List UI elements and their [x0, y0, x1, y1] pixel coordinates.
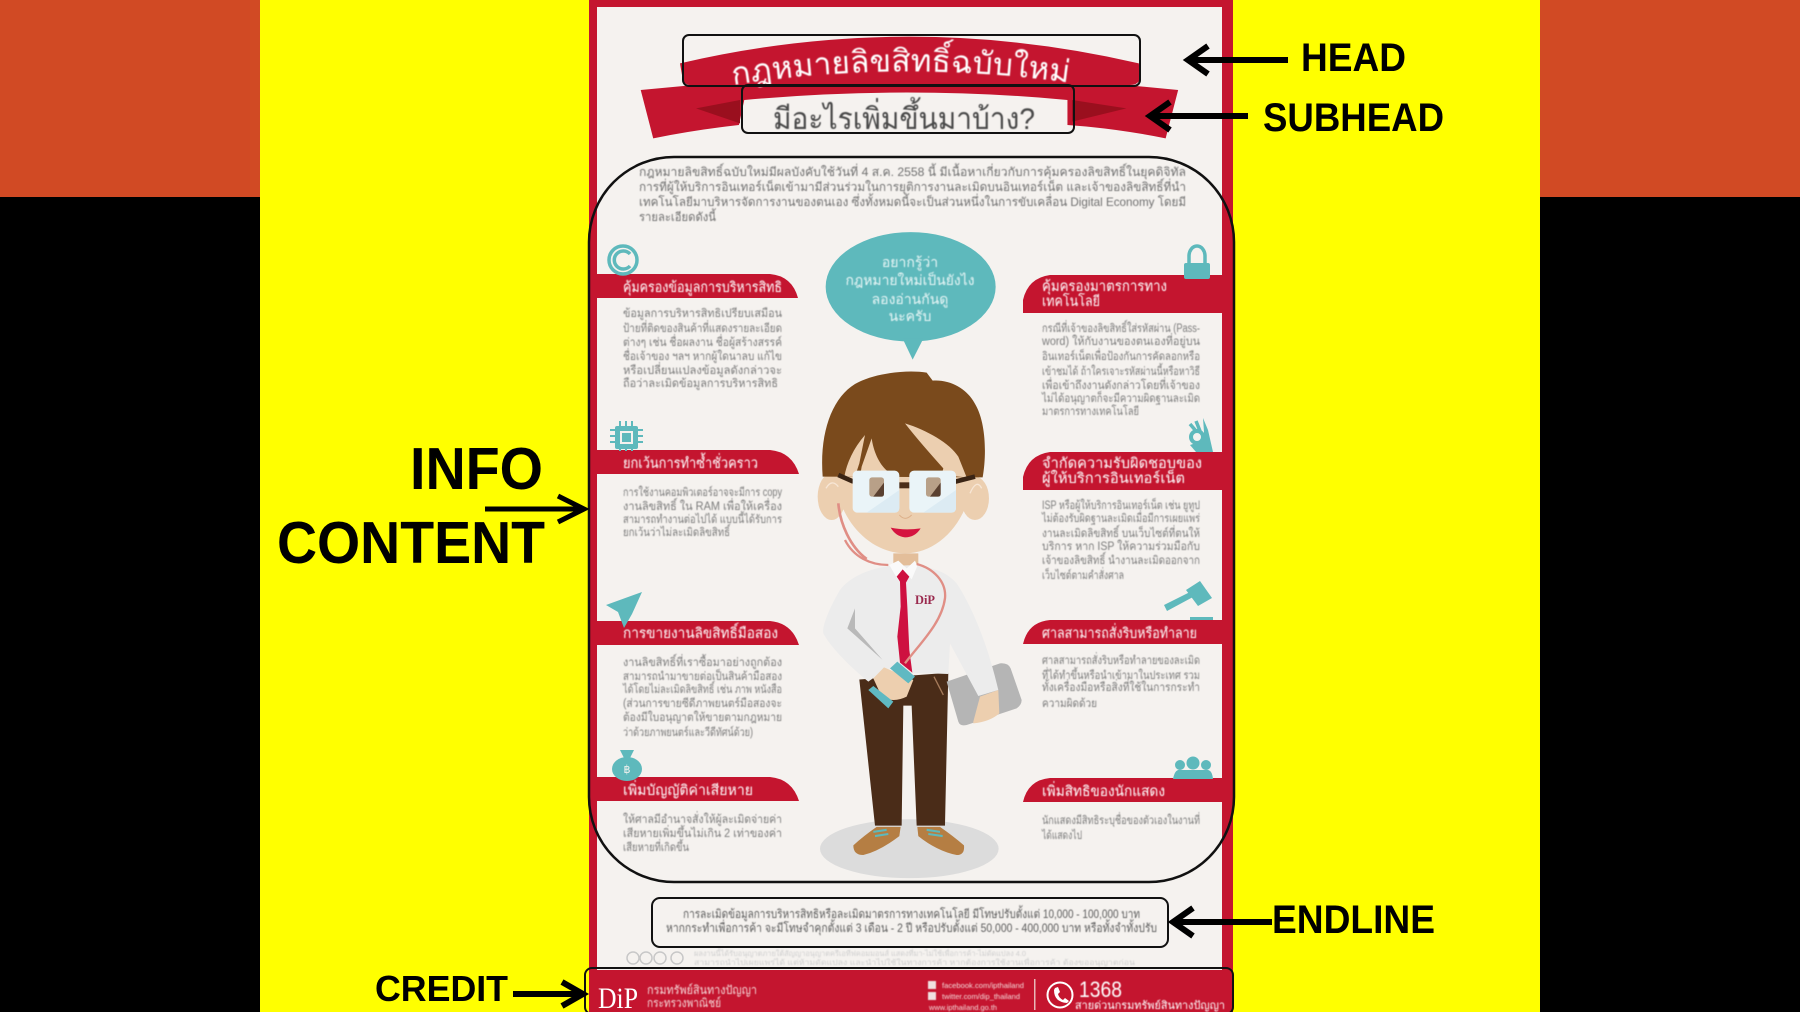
- left section 1: rights management information: [597, 274, 798, 390]
- label: SUBHEAD: SUBHEAD: [1263, 96, 1444, 140]
- left section 3: second-hand sale: การขายงานลิขสิทธิ์มือสอง: [623, 622, 778, 642]
- right section 1: technological measures: คุ้มครองมาตรการทาง: [1042, 278, 1167, 295]
- label: CREDIT: CREDIT: [375, 968, 508, 1009]
- right section 2: ISP liability: งานละเมิดลิขสิทธิ์ บนเว็บไซต์ที่ตนให้: [1042, 524, 1200, 540]
- right section 1: technological measures: word) ให้กับงานของตนเองที่อยู่บน: [1041, 333, 1200, 348]
- icons: creative commons: [627, 952, 683, 964]
- right section 3: court seizure: ศาลสามารถสั่งริบหรือทำลายของละเมิด: [1042, 652, 1200, 667]
- label: CONTENT: CONTENT: [277, 510, 545, 576]
- text block: department name: กรมทรัพย์สินทางปัญญา: [647, 983, 757, 997]
- right section 1: technological measures: ไม่ได้อนุญาตก็จะมีความผิดฐานละเมิด: [1041, 390, 1200, 405]
- icon: gavel: [1164, 581, 1213, 620]
- heading: title: กฎหมายลิขสิทธิ์ฉบับใหม่: [732, 38, 1070, 88]
- arrow: info content: [485, 496, 584, 522]
- speech bubble: กฎหมายใหม่เป็นยังไง: [846, 271, 974, 288]
- left section 1: rights management information: ข้อมูลการบริหารสิทธิเปรียบเสมือน: [623, 307, 782, 320]
- right section 4: performers' rights: นักแสดงมีสิทธิระบุชื่อของตัวเองในงานที่: [1042, 812, 1200, 827]
- text block: hotline: 1368: [1079, 977, 1122, 1002]
- right section 2: ISP liability: บริการ หาก ISP ให้ความร่วมมือกับ: [1042, 540, 1200, 553]
- right section 3: court seizure: ที่ได้ทำขึ้นหรือนำเข้ามาในประเทศ รวม: [1042, 667, 1200, 682]
- text block: introduction: การที่ผู้ให้บริการอินเทอร์เน็ตเข้ามามีส่วนร่วมในการยุติการงานละเมิดบนอินเทอร์เน็ต และเจ้าของลิขสิทธิ์ที่นำ: [639, 178, 1186, 195]
- right section 3: court seizure: [1023, 620, 1223, 710]
- text block: introduction: เทคโนโลยีมาบริหารจัดการงานของตนเอง ซึ่งทั้งหมดนี้จะเป็นส่วนหนึ่งในการขับเคลื่อน Digital Economy โดยมี: [639, 193, 1186, 209]
- left section 1: rights management information: ชื่อเจ้าของ ฯลฯ หากผู้ใดนาลบ แก้ไข: [623, 348, 782, 363]
- heading: subtitle: มีอะไรเพิ่มขึ้นมาบ้าง?: [773, 97, 1035, 136]
- left section 4: damages: ให้ศาลมีอำนาจสั่งให้ผู้ละเมิดจ่ายค่า: [623, 811, 782, 826]
- left section 3: second-hand sale: (ส่วนการขายซีดีภาพยนตร์มือสองจะ: [623, 696, 782, 710]
- right section 1: technological measures: เพื่อเข้าถึงงานดังกล่าวโดยที่เจ้าของ: [1042, 377, 1200, 392]
- title ribbon: [641, 37, 1178, 138]
- left section 2: temporary copies: [597, 450, 799, 539]
- icon: phone: [1048, 982, 1072, 1008]
- text block: social links: facebook.com/ipthailand: [942, 981, 1024, 990]
- right section 2: ISP liability: เว็บไซต์ตามคำสั่งศาล: [1042, 567, 1124, 582]
- left section 3: second-hand sale: สามารถนำมาขายต่อเป็นสินค้ามือสอง: [623, 668, 782, 683]
- right section 3: court seizure: ความผิดด้วย: [1042, 697, 1097, 710]
- left section 3: second-hand sale: ว่าด้วยภาพยนตร์และวีดีทัศน์ด้วย): [623, 725, 753, 739]
- text block: hotline: สายด่วนกรมทรัพย์สินทางปัญญา: [1075, 999, 1225, 1012]
- right section 4: performers' rights: ได้แสดงไป: [1041, 829, 1082, 842]
- text block: endline: การละเมิดข้อมูลการบริหารสิทธิหรือละเมิดมาตรการทางเทคโนโลยี มีโทษปรับตั้งแต่ 10,000 - 100,000 บาท: [683, 905, 1140, 922]
- text block: licence note: ผลงานนี้ได้รับอนุญาตภายใต้สัญญาอนุญาตครีเอทีฟคอมมอนส์ แสดงที่มา-ไม่ใช้เพื่อการค้า-ไม่ดัดแปลง 4.0: [694, 948, 1026, 958]
- right section 2: ISP liability: [1023, 452, 1223, 582]
- icon: money bag: [612, 750, 642, 781]
- right section 4: performers' rights: [1023, 778, 1223, 842]
- text block: introduction: กฎหมายลิขสิทธิ์ฉบับใหม่มีผลบังคับใช้วันที่ 4 ส.ค. 2558 นี้ มีเนื้อหาเกี่ยวกับการคุ้มครองลิขสิทธิ์ในยุคดิจิทัล: [639, 163, 1186, 180]
- arrow: head: [1188, 46, 1288, 74]
- right section 2: ISP liability: ISP หรือผู้ให้บริการอินเทอร์เน็ต เช่น ยูทูป: [1042, 497, 1200, 512]
- right section 1: technological measures: เข้าชมได้ ถ้าใครเจาะรหัสผ่านนี้หรือหาวิธี: [1042, 363, 1200, 378]
- left section 1: rights management information: ต่างๆ เช่น ชื่อผลงาน ชื่อผู้สร้างสรรค์: [623, 334, 782, 349]
- right section 2: ISP liability: จำกัดความรับผิดชอบของ: [1042, 456, 1202, 472]
- text block: social links: [928, 981, 1024, 1012]
- speech bubble: อยากรู้ว่า: [882, 254, 938, 271]
- left section 3: second-hand sale: ต้องมีใบอนุญาตให้ขายตามกฎหมาย: [623, 711, 782, 724]
- right section 1: technological measures: กรณีที่เจ้าของลิขสิทธิ์ใส่รหัสผ่าน (Pass-: [1042, 319, 1200, 335]
- left section 1: rights management information: คุ้มครองข้อมูลการบริหารสิทธิ: [623, 279, 782, 296]
- text block: social links: www.ipthailand.go.th: [928, 1003, 997, 1012]
- icon: paper plane: [606, 592, 642, 628]
- icon: money bag: ฿: [624, 764, 630, 776]
- left section 2: temporary copies: งานลิขสิทธิ์ ใน RAM เพื่อให้เครื่อง: [623, 497, 782, 513]
- text block: department name: กระทรวงพาณิชย์: [647, 996, 721, 1010]
- left section 1: rights management information: ป้ายที่ติดของสินค้าที่แสดงรายละเอียด: [623, 320, 782, 335]
- label: HEAD: HEAD: [1301, 36, 1406, 80]
- right section 2: ISP liability: เจ้าของลิขสิทธิ์ นำงานละเมิดออกจาก: [1042, 551, 1200, 567]
- icon: copyright: [609, 246, 637, 274]
- text block: social links: twitter.com/dip_thailand: [942, 992, 1020, 1001]
- left section 3: second-hand sale: งานลิขสิทธิ์ที่เราซื้อมาอย่างถูกต้อง: [623, 653, 782, 669]
- right section 1: technological measures: มาตรการทางเทคโนโลยี: [1042, 404, 1139, 418]
- text block: endline: [666, 905, 1157, 936]
- text block: hotline: [1075, 977, 1225, 1012]
- text block: licence note: [694, 948, 1135, 967]
- right section 2: ISP liability: ผู้ให้บริการอินเทอร์เน็ต: [1042, 468, 1185, 487]
- speech bubble: [826, 232, 996, 360]
- outline: subhead: [742, 85, 1074, 133]
- speech bubble: ลองอ่านกันดู: [872, 291, 948, 308]
- left section 4: damages: เพิ่มบัญญัติค่าเสียหาย: [623, 780, 753, 799]
- outline: credit: [585, 968, 1233, 1012]
- left section 2: temporary copies: สามารถทำงานต่อไปได้ แบบนี้ได้รับการ: [623, 511, 782, 526]
- right section 4: performers' rights: เพิ่มสิทธิของนักแสดง: [1042, 781, 1165, 800]
- text block: introduction: [639, 163, 1186, 224]
- icon: microchip: [610, 421, 643, 451]
- icon: ok hand: [1190, 418, 1213, 452]
- icon: people: [1173, 756, 1213, 779]
- right section 1: technological measures: เทคโนโลยี: [1042, 292, 1100, 310]
- left section 2: temporary copies: ยกเว้นว่าไม่ละเมิดลิขสิทธิ์: [623, 523, 731, 539]
- icon: padlock: [1184, 246, 1210, 279]
- arrow: credit: [513, 982, 583, 1006]
- text block: introduction: รายละเอียดดังนี้: [639, 208, 717, 224]
- label: INFO: INFO: [410, 436, 543, 502]
- left section 3: second-hand sale: ได้โดยไม่ละเมิดลิขสิทธิ์ เช่น ภาพ หนังสือ: [622, 680, 782, 696]
- arrow: endline: [1173, 908, 1272, 936]
- label: ENDLINE: ENDLINE: [1272, 898, 1435, 942]
- left section 2: temporary copies: การใช้งานคอมพิวเตอร์อาจจะมีการ copy: [623, 485, 782, 499]
- left section 3: second-hand sale: [597, 621, 799, 739]
- arrow: subhead: [1150, 102, 1248, 130]
- left section 1: rights management information: หรือเปลี่ยนแปลงข้อมูลดังกล่าวจะ: [623, 362, 782, 377]
- right section 3: court seizure: ศาลสามารถสั่งริบหรือทำลาย: [1042, 623, 1197, 642]
- text block: department name: [647, 983, 757, 1010]
- outline: info content: [589, 157, 1234, 882]
- text block: licence note: สามารถนำไปเผยแพร่ได้ แต่ห้ามดัดแปลง และนำไปใช้ในทางการค้า หากต้องการใช้งานเพื่อการค้า ต้องขออนุญาตก่อน: [694, 957, 1135, 967]
- shirt logo: DiP: [915, 592, 935, 607]
- text block: endline: หากกระทำเพื่อการค้า จะมีโทษจำคุกตั้งแต่ 3 เดือน - 2 ปี หรือปรับตั้งแต่ 50,000 - 400,000 บาท หรือทั้งจำทั้งปรับ: [666, 919, 1157, 936]
- right section 2: ISP liability: ไม่ต้องรับผิดฐานละเมิดเมื่อมีการเผยแพร่: [1041, 510, 1200, 525]
- panel: credit footer: [589, 970, 1233, 1012]
- outline: endline: [652, 898, 1168, 947]
- panel: poster: [589, 0, 1233, 1012]
- right section 1: technological measures: อินเทอร์เน็ตเพื่อป้องกันการคัดลอกหรือ: [1042, 348, 1200, 363]
- illustration: character: [818, 372, 1022, 878]
- right section 1: technological measures: [1023, 275, 1223, 418]
- left section 4: damages: เสียหายที่เกิดขึ้น: [623, 839, 689, 854]
- speech bubble: นะครับ: [889, 308, 931, 324]
- left section 1: rights management information: ถือว่าละเมิดข้อมูลการบริหารสิทธิ: [623, 377, 778, 390]
- outline: head: [683, 35, 1140, 86]
- left section 4: damages: [597, 777, 799, 854]
- left section 4: damages: เสียหายเพิ่มขึ้นไม่เกิน 2 เท่าของค่า: [623, 825, 782, 840]
- left section 2: temporary copies: ยกเว้นการทำซ้ำชั่วคราว: [623, 452, 758, 472]
- right section 3: court seizure: ทั้งเครื่องมือหรือสิ่งที่ใช้ในการกระทำ: [1042, 679, 1200, 694]
